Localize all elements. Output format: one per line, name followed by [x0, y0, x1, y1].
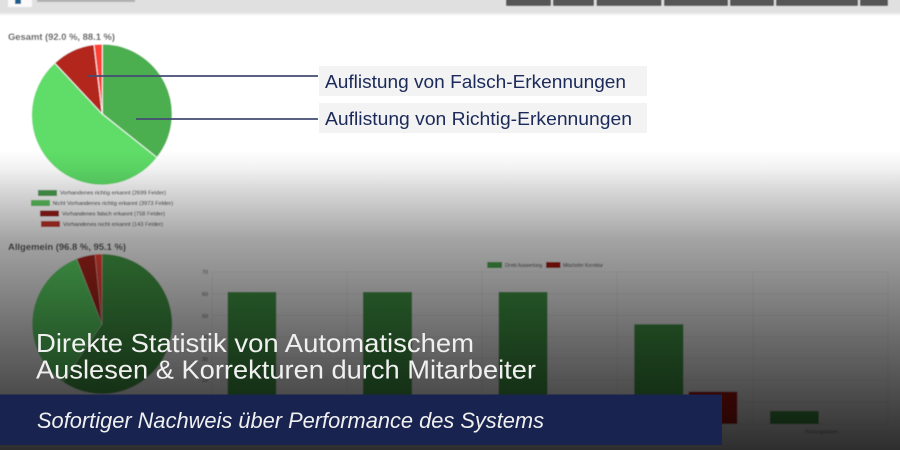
callout: Richtig-Erkennungen: Auflistung von Richtig-Erkennungen — [325, 108, 632, 129]
banner: Sofortiger Nachweis über Performance des Systems — [37, 408, 544, 433]
callout: Falsch-Erkennungen — [88, 66, 647, 96]
heading: Gesamt: Gesamt (92.0 %, 88.1 %) — [8, 32, 115, 43]
dark gradient overlay — [0, 150, 900, 450]
legend: Gesamt: Vorhandenes richtig erkannt (2699 Felder) — [60, 191, 166, 197]
y axis labels: 60 — [202, 292, 208, 298]
y axis labels: 50 — [202, 314, 208, 320]
y axis labels: 70 — [202, 270, 208, 276]
bar chart — [202, 262, 888, 436]
chart legend: Mitarbeiter Korrektur — [563, 263, 603, 269]
title: Direkte Statistik von Automatischem — [36, 328, 474, 358]
pie chart: Gesamt — [31, 44, 172, 185]
callout: Falsch-Erkennungen: Auflistung von Falsch-Erkennungen — [325, 71, 626, 92]
y axis labels: 40 — [202, 335, 208, 341]
title — [36, 328, 536, 384]
title: Auslesen & Korrekturen durch Mitarbeiter — [36, 354, 536, 384]
banner — [0, 394, 722, 445]
y axis labels: 10 — [202, 400, 208, 406]
y axis labels: 30 — [202, 357, 208, 363]
callout: Richtig-Erkennungen — [136, 103, 647, 133]
x axis label: Planungsdaten — [805, 430, 838, 436]
legend: Gesamt: Nicht Vorhandenes richtig erkannt (3973 Felder) — [53, 201, 173, 207]
app header bar — [0, 0, 900, 15]
pie chart: Allgemein — [32, 254, 172, 394]
legend: Gesamt: Vorhandenes nicht erkannt (143 Felder) — [63, 222, 163, 228]
legend: Gesamt — [31, 190, 173, 228]
chart legend: Direkt Auswertung — [505, 263, 542, 269]
y axis labels: 20 — [202, 378, 208, 384]
chart legend — [487, 262, 603, 269]
heading: Allgemein: Allgemein (96.8 %, 95.1 %) — [8, 242, 126, 253]
legend: Gesamt: Vorhandenes falsch erkannt (758 Felder) — [62, 211, 165, 217]
y axis labels — [202, 270, 208, 406]
